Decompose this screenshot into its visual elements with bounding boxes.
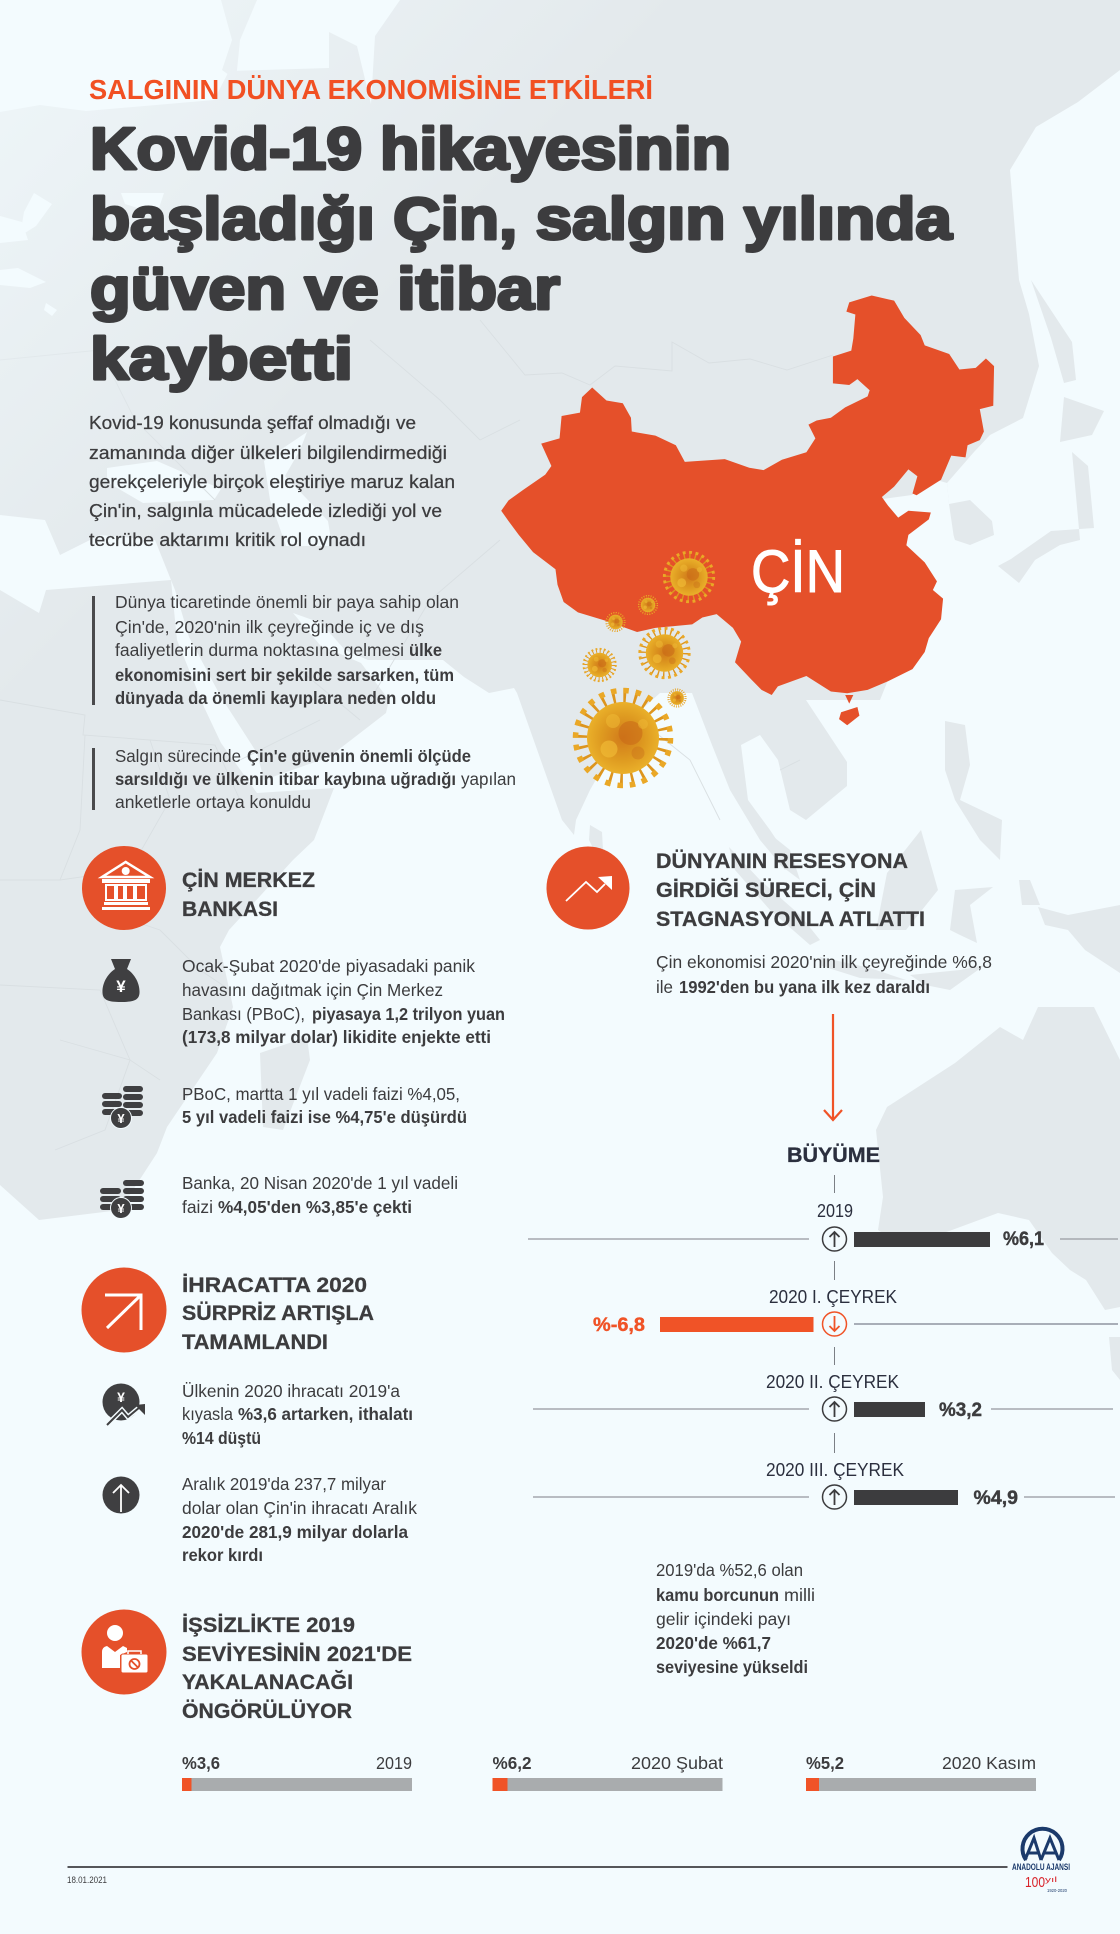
row: 2020 Q1: 2020 I. ÇEYREK xyxy=(769,1287,897,1307)
bar: unemployment 2019 xyxy=(182,1753,412,1791)
bar: unemployment 2019: 2019 xyxy=(376,1753,412,1773)
intro text xyxy=(89,413,455,550)
text: rates: PBoC, martta 1 yıl vadeli faizi %4,05, xyxy=(182,1084,460,1104)
text: april cut xyxy=(182,1173,458,1217)
arrow: down xyxy=(824,1014,842,1120)
heading: İŞSİZLİKTE 2019 xyxy=(182,1613,355,1637)
panel: unemployment xyxy=(82,1610,412,1723)
text: export rise: kıyasla xyxy=(182,1404,233,1424)
map: China xyxy=(501,295,994,725)
chart: growth xyxy=(528,1144,1118,1509)
text block: trade: ülke xyxy=(409,640,442,660)
heading: YAKALANACAĞI xyxy=(182,1669,353,1694)
row: 2020 Q3 xyxy=(533,1460,1115,1509)
heading xyxy=(182,868,315,921)
date: 18.01.2021 xyxy=(67,1875,107,1886)
heading: BANKASI xyxy=(182,897,278,921)
text: public debt: 2019'da %52,6 olan xyxy=(656,1560,803,1580)
text: liquidity: havasını dağıtmak için Çin Merkez xyxy=(182,980,443,1000)
icon: unemployed person xyxy=(82,1610,166,1694)
text: export rise: Ülkenin 2020 ihracatı 2019'a xyxy=(182,1381,400,1401)
text: april cut: Banka, 20 Nisan 2020'de 1 yıl vadeli xyxy=(182,1173,458,1193)
text: export record xyxy=(182,1474,417,1565)
intro text: tecrübe aktarımı kritik rol oynadı xyxy=(89,530,366,550)
title: kaybetti xyxy=(90,326,353,392)
footer line xyxy=(68,1866,1008,1868)
bar: unemployment 2019: %3,6 xyxy=(182,1753,220,1773)
intro text: zamanında diğer ülkeleri bilgilendirmediği xyxy=(89,443,447,463)
intro text: Çin'in, salgınla mücadelede izlediği yol ve xyxy=(89,501,442,521)
bar: unemployment November 2020: 2020 Kasım xyxy=(942,1753,1036,1773)
row: 2020 Q3: 2020 III. ÇEYREK xyxy=(766,1460,904,1480)
row: 2020 Q1 xyxy=(593,1287,1118,1336)
icon: coins: ¥ xyxy=(117,1201,125,1216)
text: liquidity: piyasaya 1,2 trilyon yuan xyxy=(312,1004,505,1024)
icon: yen growth xyxy=(102,1384,145,1425)
text: public debt: 2020'de %61,7 xyxy=(656,1633,771,1653)
row: 2019: 2019 xyxy=(817,1201,853,1221)
text: export record: Aralık 2019'da 237,7 milyar xyxy=(182,1474,386,1494)
panel: recession xyxy=(546,846,992,1120)
text block: reputation: sarsıldığı ve ülkenin itibar kaybına uğradığı xyxy=(115,769,456,789)
row: 2019 xyxy=(528,1201,1118,1251)
text: public debt: kamu borcunun xyxy=(656,1585,779,1605)
row: 2020 Q3: %4,9 xyxy=(974,1488,1018,1509)
text: liquidity: (173,8 milyar dolar) likidite enjekte etti xyxy=(182,1027,491,1047)
bar: unemployment November 2020: %5,2 xyxy=(806,1753,844,1773)
title: başladığı Çin, salgın yılında xyxy=(90,186,953,252)
text block: reputation: Salgın sürecinde xyxy=(115,746,241,766)
heading: DÜNYANIN RESESYONA xyxy=(656,848,908,873)
icon: yen growth: ¥ xyxy=(117,1389,125,1405)
text: rates xyxy=(182,1084,467,1127)
heading: SÜRPRİZ ARTIŞLA xyxy=(182,1300,374,1325)
icon: growth line xyxy=(546,846,630,930)
text: export rise: %3,6 artarken, ithalatı xyxy=(238,1404,413,1424)
intro text: Kovid-19 konusunda şeffaf olmadığı ve xyxy=(89,413,416,433)
logo: Anadolu Ajansı: 100 xyxy=(1025,1874,1045,1891)
heading xyxy=(656,848,925,931)
text: export record: 2020'de 281,9 milyar dolarla xyxy=(182,1522,408,1542)
chart title: BÜYÜME xyxy=(787,1144,880,1167)
bar: unemployment February 2020 xyxy=(492,1753,723,1791)
logo: Anadolu Ajansı: yıl xyxy=(1045,1877,1058,1884)
text: export record: dolar olan Çin'in ihracatı Aralık xyxy=(182,1498,417,1518)
text: liquidity: Ocak-Şubat 2020'de piyasadaki panik xyxy=(182,956,475,976)
icon: coins: ¥ xyxy=(117,1111,125,1126)
logo: Anadolu Ajansı: ANADOLU AJANSI xyxy=(1012,1862,1070,1873)
icon: arrow up-right xyxy=(82,1268,166,1352)
logo: Anadolu Ajansı: 1920-2020 xyxy=(1047,1888,1067,1893)
heading: ÇİN MERKEZ xyxy=(182,868,315,892)
text: liquidity xyxy=(182,956,505,1047)
bar: unemployment February 2020: 2020 Şubat xyxy=(631,1753,723,1773)
row: 2020 Q1: %-6,8 xyxy=(593,1315,645,1336)
title: Kovid-19 hikayesinin xyxy=(90,116,731,182)
text: public debt: gelir içindeki payı xyxy=(656,1609,791,1629)
row: 2020 Q2: 2020 II. ÇEYREK xyxy=(766,1372,899,1392)
text block: trade: dünyada da önemli kayıplara neden oldu xyxy=(115,688,436,708)
heading: İHRACATTA 2020 xyxy=(182,1273,367,1297)
text block: reputation: anketlerle ortaya konuldu xyxy=(115,792,311,812)
heading xyxy=(182,1613,412,1723)
text: liquidity: Bankası (PBoC), xyxy=(182,1004,305,1024)
text block: reputation: Çin'e güvenin önemli ölçüde xyxy=(247,746,471,766)
bar: unemployment November 2020 xyxy=(806,1753,1036,1791)
text block: trade: ekonomisini sert bir şekilde sarsarken, tüm xyxy=(115,665,454,685)
row: 2020 Q2 xyxy=(533,1372,1113,1421)
text: april cut: %4,05'den %3,85'e çekti xyxy=(218,1197,412,1217)
title xyxy=(90,116,953,392)
text: export rise: %14 düştü xyxy=(182,1428,261,1448)
icon: money bag xyxy=(102,959,140,1002)
heading xyxy=(182,1273,374,1354)
icon: money bag: ¥ xyxy=(116,977,126,996)
bar: unemployment February 2020: %6,2 xyxy=(492,1753,532,1773)
row: 2020 Q2: %3,2 xyxy=(939,1400,982,1421)
text block: trade: Dünya ticaretinde önemli bir paya sahip olan xyxy=(115,592,459,612)
heading: ÖNGÖRÜLÜYOR xyxy=(182,1698,352,1723)
panel: exports xyxy=(82,1268,417,1565)
icon: bank xyxy=(82,846,166,930)
icon: up arrow xyxy=(102,1476,140,1514)
text block: trade xyxy=(92,592,459,708)
text block: reputation: yapılan xyxy=(461,769,516,789)
icon: coins xyxy=(102,1086,143,1128)
icon: coins xyxy=(100,1180,144,1218)
text: public debt: milli xyxy=(784,1585,815,1605)
row: 2019: %6,1 xyxy=(1003,1229,1044,1250)
text: april cut: faizi xyxy=(182,1197,213,1217)
world map background xyxy=(0,0,1120,1380)
panel: central bank xyxy=(82,846,505,1218)
text: public debt: seviyesine yükseldi xyxy=(656,1657,808,1677)
text: contraction xyxy=(656,952,992,997)
text block: trade: faaliyetlerin durma noktasına gelmesi xyxy=(115,640,404,660)
text: export rise xyxy=(182,1381,413,1448)
title: güven ve itibar xyxy=(90,256,560,322)
heading: TAMAMLANDI xyxy=(182,1330,328,1354)
text: export record: rekor kırdı xyxy=(182,1545,263,1565)
text block: reputation xyxy=(92,746,516,812)
kicker heading: SALGININ DÜNYA EKONOMİSİNE ETKİLERİ xyxy=(89,74,653,105)
heading: GİRDİĞİ SÜRECİ, ÇİN xyxy=(656,877,876,902)
heading: STAGNASYONLA ATLATTI xyxy=(656,907,925,931)
intro text: gerekçeleriyle birçok eleştiriye maruz kalan xyxy=(89,472,455,492)
text block: trade: Çin'de, 2020'nin ilk çeyreğinde iç ve dış xyxy=(115,617,424,637)
text: rates: 5 yıl vadeli faizi ise %4,75'e düşürdü xyxy=(182,1107,467,1127)
text: contraction: Çin ekonomisi 2020'nin ilk çeyreğinde %6,8 xyxy=(656,952,992,972)
label: ÇİN: ÇİN xyxy=(751,538,845,605)
logo: Anadolu Ajansı xyxy=(1012,1829,1070,1893)
heading: SEVİYESİNİN 2021'DE xyxy=(182,1642,412,1666)
icons: coronavirus particles xyxy=(576,552,714,786)
text: contraction: 1992'den bu yana ilk kez daraldı xyxy=(679,977,930,997)
text: public debt xyxy=(656,1560,815,1677)
text: contraction: ile xyxy=(656,977,673,997)
